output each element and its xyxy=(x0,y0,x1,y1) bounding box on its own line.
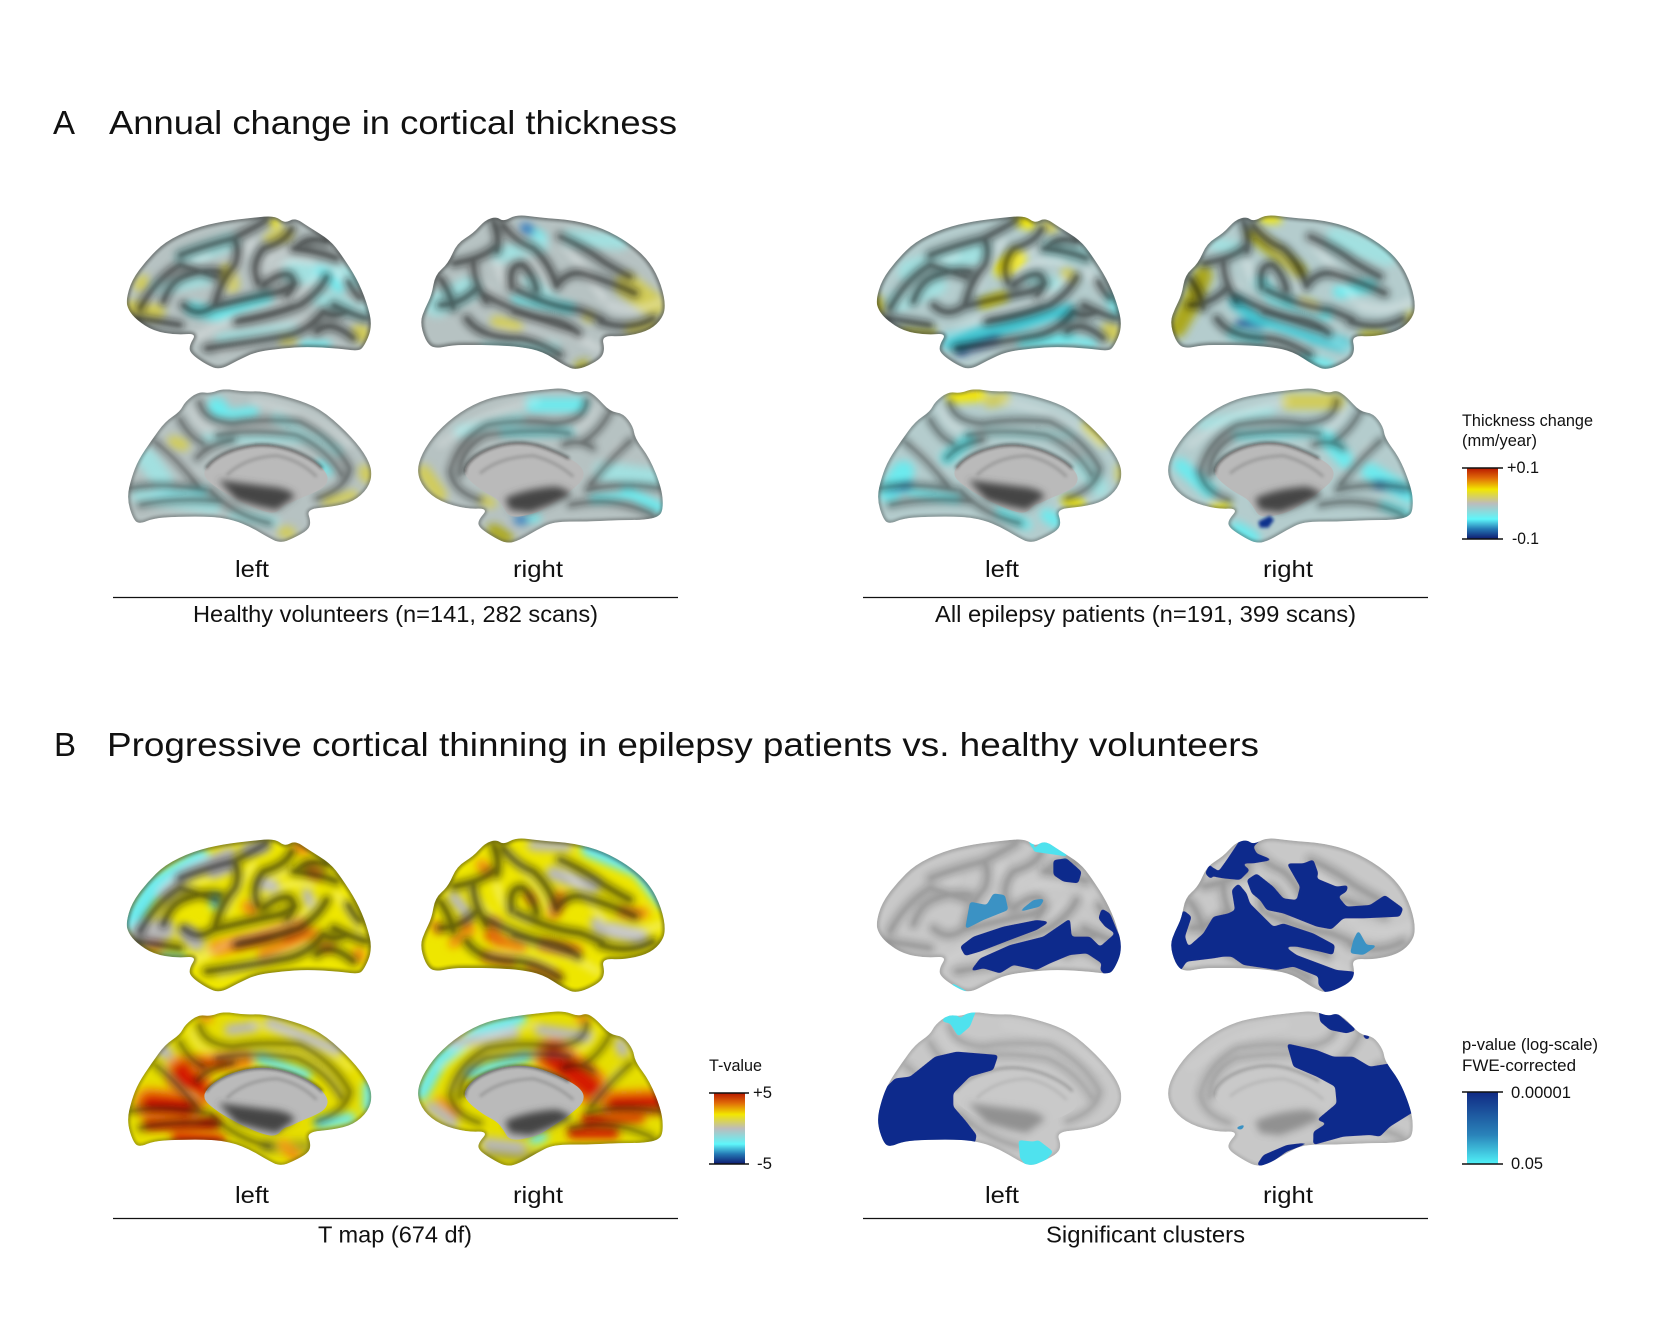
panel: T map xyxy=(113,838,678,1248)
brain views: healthy volunteers xyxy=(127,215,665,543)
brain: left lateral xyxy=(877,216,1121,368)
legend: thickness change xyxy=(1462,412,1593,548)
legend: p-value: FWE-corrected xyxy=(1462,1057,1576,1075)
legend: p-value: p-value (log-scale) xyxy=(1462,1036,1598,1054)
brain: right medial xyxy=(1168,1007,1417,1167)
legend: p-value: 0.05 xyxy=(1511,1155,1543,1173)
brain: right lateral xyxy=(1171,215,1415,369)
brain views: all epilepsy patients xyxy=(877,215,1415,543)
brain: right lateral xyxy=(1165,833,1415,994)
brain: left lateral xyxy=(127,216,371,368)
caption: all epilepsy patients: All epilepsy patients (n=191, 399 scans) xyxy=(935,601,1356,627)
legend: thickness change: +0.1 xyxy=(1507,459,1539,477)
legend: T-value xyxy=(709,1057,772,1173)
heading: A: Annual change in cortical thickness xyxy=(109,104,677,141)
caption: healthy volunteers: Healthy volunteers (n=141, 282 scans) xyxy=(193,601,598,627)
brain: right medial xyxy=(418,1011,663,1166)
legend: T-value: +5 xyxy=(753,1084,772,1102)
heading: B: B xyxy=(54,726,76,763)
brain: right lateral xyxy=(421,838,665,992)
legend: thickness change: Thickness change xyxy=(1462,412,1593,430)
label: right: right xyxy=(1263,556,1314,582)
brain: right lateral xyxy=(421,215,665,369)
label: left: left xyxy=(235,1182,270,1208)
brain: left lateral xyxy=(877,833,1128,994)
caption: significant clusters: Significant clusters xyxy=(1046,1222,1245,1248)
brain views: significant clusters xyxy=(870,833,1417,1170)
brain: right medial xyxy=(1168,388,1413,543)
brain: left lateral xyxy=(127,839,371,991)
legend: p-value xyxy=(1462,1036,1598,1173)
panel: healthy volunteers xyxy=(113,215,678,627)
panel: significant clusters xyxy=(863,833,1428,1248)
legend: T-value: T-value xyxy=(709,1057,762,1075)
legend: p-value: 0.00001 xyxy=(1511,1084,1571,1102)
legend: T-value: -5 xyxy=(757,1155,772,1173)
brain views: T map xyxy=(127,838,665,1166)
brain: right medial xyxy=(418,388,663,543)
label: left: left xyxy=(985,1182,1020,1208)
brain: left medial xyxy=(128,1012,371,1165)
heading: A: A xyxy=(53,104,75,141)
legend: thickness change: (mm/year) xyxy=(1462,432,1537,450)
label: right: right xyxy=(1263,1182,1314,1208)
panel: all epilepsy patients xyxy=(863,215,1428,627)
heading: B: Progressive cortical thinning in epilepsy patients vs. healthy volunteers xyxy=(107,726,1259,763)
label: left: left xyxy=(235,556,270,582)
brain: left medial xyxy=(878,1012,1122,1165)
label: right: right xyxy=(513,556,564,582)
brain: left medial xyxy=(128,389,371,542)
caption: T map: T map (674 df) xyxy=(318,1222,472,1248)
legend: thickness change: -0.1 xyxy=(1512,530,1539,548)
label: left: left xyxy=(985,556,1020,582)
label: right: right xyxy=(513,1182,564,1208)
brain: left medial xyxy=(878,389,1121,542)
